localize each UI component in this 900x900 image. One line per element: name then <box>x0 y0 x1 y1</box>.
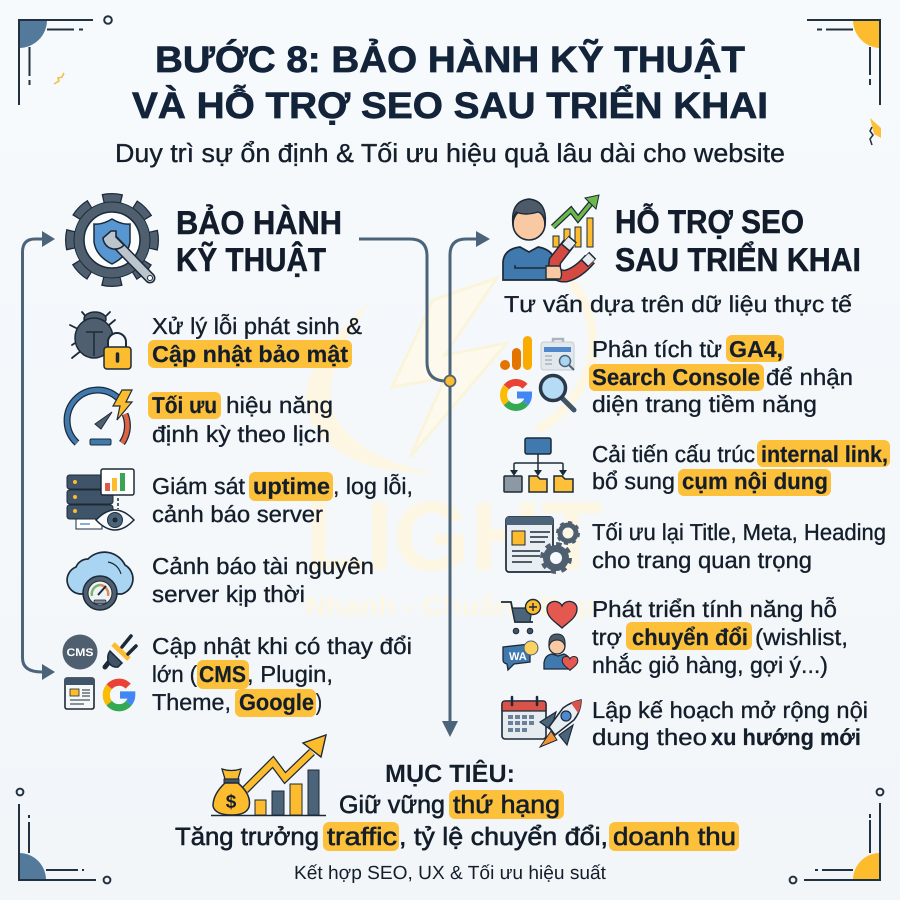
item: major updates <box>62 633 412 717</box>
watermark: LIGHT logo: Nhanh - Chuẩn - Đẹp <box>305 591 595 621</box>
item: resource alerts <box>67 552 374 610</box>
text: CMS <box>199 661 246 687</box>
text: Google <box>239 689 314 715</box>
panel: goal <box>175 735 739 884</box>
panel: SEO support <box>500 195 890 750</box>
watermark: LIGHT logo: LIGHT <box>305 481 602 591</box>
icon: CMS, plug, browser and Google: CMS <box>66 647 94 659</box>
text <box>589 335 853 417</box>
text: Xử lý lỗi phát sinh & <box>152 313 362 339</box>
item: uptime monitoring <box>67 469 413 530</box>
text: lớn ( <box>152 661 197 687</box>
text <box>148 392 333 447</box>
icon: calendar and rocket <box>502 697 581 747</box>
item: title meta heading <box>506 517 886 573</box>
text: cho trang quan trọng <box>592 547 812 573</box>
title: BƯỚC 8: BẢO HÀNH KỸ THUẬT <box>155 38 745 80</box>
text: Search Console <box>592 364 760 390</box>
icon: consultant with magnet and growth chart <box>503 195 599 280</box>
text: Lập kế hoạch mở rộng nội <box>592 697 868 723</box>
text: , log lỗi, <box>333 473 413 499</box>
heading: SEO support: HỖ TRỢ SEO <box>615 203 804 240</box>
icon: cloud with gauge <box>67 552 133 610</box>
icon: cart, heart, chat and user <box>501 600 578 670</box>
goal text: thứ hạng <box>453 791 560 819</box>
icon: server with chart and eye <box>67 469 134 530</box>
text: cảnh báo server <box>152 501 323 527</box>
icon: bug and padlock <box>70 312 131 369</box>
item: content expansion <box>502 697 868 750</box>
goal text: doanh thu <box>613 823 736 851</box>
heading: warranty: BẢO HÀNH <box>176 204 342 241</box>
goal text: Giữ vững <box>339 791 445 819</box>
arrow: centre line to SEO and goal <box>442 231 490 737</box>
text: Cảnh báo tài nguyên <box>152 553 374 579</box>
text <box>152 472 413 527</box>
corner decoration: top left <box>19 16 112 105</box>
text <box>592 440 890 496</box>
text: để nhận <box>766 364 853 390</box>
icon: page with gears <box>506 517 578 572</box>
heading: warranty <box>176 204 342 278</box>
heading: SEO support <box>615 203 861 278</box>
subtitle: Duy trì sự ổn định & Tối ưu hiệu quả lâu dài cho website <box>115 138 785 168</box>
icon: money bag with rising chart <box>211 735 326 816</box>
subheading: Tư vấn dựa trên dữ liệu thực tế <box>504 291 852 317</box>
title <box>132 38 768 126</box>
text: server kịp thời <box>152 581 305 607</box>
text: (wishlist, <box>755 624 848 650</box>
watermark: LIGHT logo <box>305 278 602 621</box>
icon: money bag with rising chart: $ <box>226 792 237 813</box>
text: cụm nội dung <box>682 468 828 494</box>
text: GA4, <box>729 336 783 362</box>
text: Cải tiến cấu trúc <box>592 441 755 467</box>
text: hiệu năng <box>226 392 333 418</box>
item: bug fixes and security <box>70 312 362 369</box>
item: scheduled performance <box>67 390 333 447</box>
text: Tối ưu lại Title, Meta, Heading <box>592 519 886 545</box>
centre node <box>444 376 456 386</box>
icon: GA4, Search Console, Google and magnifier <box>500 336 574 410</box>
title: VÀ HỖ TRỢ SEO SAU TRIỂN KHAI <box>132 84 768 126</box>
text: dung theo <box>592 724 707 750</box>
item: internal links <box>504 438 890 496</box>
text: Theme, <box>152 689 231 715</box>
text: Cập nhật bảo mật <box>152 341 348 367</box>
text: nhắc giỏ hàng, gợi ý...) <box>592 652 828 678</box>
panel: technical warranty <box>62 199 413 717</box>
text <box>152 633 412 717</box>
text: Cập nhật khi có thay đổi <box>152 633 412 659</box>
corner decoration: bottom right <box>790 789 883 883</box>
arrow: left feedback loop <box>22 231 55 680</box>
goal text: , tỷ lệ chuyển đổi, <box>399 823 608 851</box>
heading: warranty: KỸ THUẬT <box>176 241 326 278</box>
goal text: MỤC TIÊU: <box>385 759 515 788</box>
text: chuyển đổi <box>632 624 748 650</box>
text <box>148 313 362 368</box>
icon: CMS, plug, browser and Google <box>62 634 136 709</box>
text: Tối ưu <box>152 392 217 418</box>
text: Phân tích từ <box>592 336 722 362</box>
text: internal link, <box>761 441 888 467</box>
item: conversion features <box>501 596 848 678</box>
item: analytics <box>500 335 853 417</box>
text <box>592 519 886 573</box>
heading: SEO support: SAU TRIỂN KHAI <box>615 241 861 278</box>
text: bổ sung <box>592 468 675 494</box>
corner decoration: top right <box>807 20 881 145</box>
text: Phát triển tính năng hỗ <box>592 596 837 622</box>
goal text: Tăng trưởng <box>175 823 319 851</box>
corner decoration: bottom left <box>17 789 110 883</box>
footer note: Kết hợp SEO, UX & Tối ưu hiệu suất <box>294 863 607 884</box>
text: Giám sát <box>152 473 246 499</box>
text: diện trang tiềm năng <box>592 391 817 417</box>
text: trợ <box>592 624 622 650</box>
text: định kỳ theo lịch <box>152 421 330 447</box>
icon: cart, heart, chat and user: WA <box>509 651 527 663</box>
text: uptime <box>253 473 330 499</box>
text: ) <box>316 689 322 715</box>
icon: site hierarchy <box>504 438 573 492</box>
goal text <box>175 759 739 851</box>
goal text: traffic <box>327 823 397 851</box>
text: xu hướng mới <box>711 724 861 750</box>
text: , Plugin, <box>247 661 333 687</box>
text <box>592 697 868 750</box>
icon: gear with shield and wrench <box>71 199 153 281</box>
arrow: connector from warranty to centre node <box>359 239 446 381</box>
text <box>152 553 374 607</box>
text <box>592 596 848 678</box>
icon: speed gauge with lightning <box>67 390 132 445</box>
